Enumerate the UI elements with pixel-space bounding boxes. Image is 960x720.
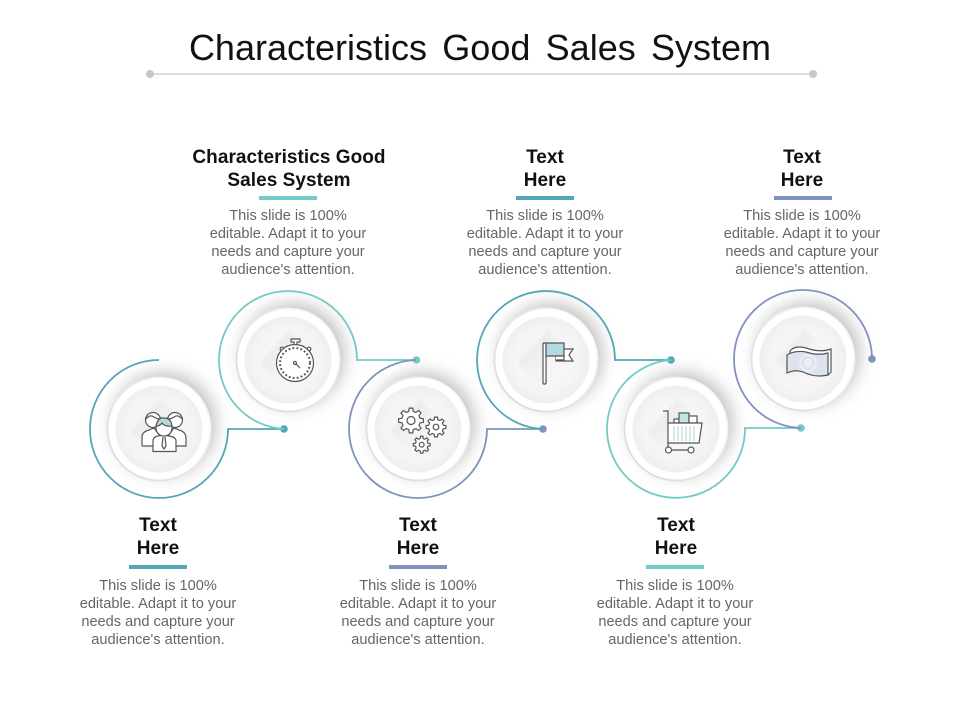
text block: step 1 body <box>80 578 236 648</box>
accent bar: step 1 <box>129 565 187 569</box>
text block: step 5 body: audience's attention. <box>608 632 742 648</box>
text block: step 5 body <box>597 578 753 648</box>
text block: step 1 body: This slide is 100% <box>99 578 217 594</box>
text block: step 3 body: This slide is 100% <box>359 578 477 594</box>
text block: step 3 body: editable. Adapt it to your <box>340 596 496 612</box>
text block: step 4 body <box>467 208 623 278</box>
text block: step 1 heading <box>137 515 179 559</box>
text block: step 6 heading: Here <box>781 170 823 191</box>
text block: step 1 heading: Text <box>139 515 177 536</box>
text block: step 1 body: needs and capture your <box>81 614 235 630</box>
text block: step 1 body: editable. Adapt it to your <box>80 596 236 612</box>
text block: step 6 body: editable. Adapt it to your <box>724 226 880 242</box>
icon: stopwatch <box>276 339 314 382</box>
text block: step 3 heading: Text <box>399 515 437 536</box>
icon: banknote <box>787 347 831 376</box>
text block: step 2 body: audience's attention. <box>221 262 355 278</box>
text block: step 5 body: This slide is 100% <box>616 578 734 594</box>
title: Characteristics Good Sales System <box>189 27 771 68</box>
text block: step 2 body: needs and capture your <box>211 244 365 260</box>
text block: step 3 heading <box>397 515 439 559</box>
step 1 disc and arc <box>90 360 288 498</box>
text block: step 4 heading: Text <box>526 147 564 168</box>
text block: step 3 body: needs and capture your <box>341 614 495 630</box>
accent bar: step 5 <box>646 565 704 569</box>
text block: step 4 body: editable. Adapt it to your <box>467 226 623 242</box>
text block: step 2 body <box>210 208 366 278</box>
accent bar: step 2 <box>259 196 317 200</box>
text block: step 2 heading: Characteristics Good <box>192 147 386 168</box>
icon: flag <box>543 343 573 384</box>
text block: step 4 body: needs and capture your <box>468 244 622 260</box>
step 5 disc and arc <box>607 360 805 498</box>
text block: step 6 body: needs and capture your <box>725 244 879 260</box>
text block: step 2 body: editable. Adapt it to your <box>210 226 366 242</box>
text block: step 5 heading <box>655 515 697 559</box>
text block: step 2 body: This slide is 100% <box>229 208 347 224</box>
text block: step 4 body: audience's attention. <box>478 262 612 278</box>
title rule <box>146 70 817 78</box>
text block: step 3 heading: Here <box>397 538 439 559</box>
text block: step 1 body: audience's attention. <box>91 632 225 648</box>
icon: team of people <box>142 412 186 452</box>
text block: step 4 body: This slide is 100% <box>486 208 604 224</box>
text block: step 4 heading: Here <box>524 170 566 191</box>
text block: step 6 body <box>724 208 880 278</box>
step 6 disc and arc <box>734 290 876 428</box>
text block: step 6 heading: Text <box>783 147 821 168</box>
text block: step 4 heading <box>524 147 566 191</box>
text block: step 6 heading <box>781 147 823 191</box>
step 3 disc and arc <box>349 360 547 498</box>
text block: step 3 body <box>340 578 496 648</box>
text block: step 3 body: audience's attention. <box>351 632 485 648</box>
step 4 disc and arc <box>477 291 675 429</box>
icon: gears <box>399 408 446 453</box>
accent bar: step 4 <box>516 196 574 200</box>
text block: step 5 body: needs and capture your <box>598 614 752 630</box>
text block: step 5 heading: Here <box>655 538 697 559</box>
text block: step 6 body: This slide is 100% <box>743 208 861 224</box>
accent bar: step 6 <box>774 196 832 200</box>
text block: step 1 heading: Here <box>137 538 179 559</box>
text block: step 5 body: editable. Adapt it to your <box>597 596 753 612</box>
text block: step 5 heading: Text <box>657 515 695 536</box>
icon: shopping cart <box>663 411 702 453</box>
accent bar: step 3 <box>389 565 447 569</box>
step 2 disc and arc <box>219 291 420 429</box>
text block: step 2 heading: Sales System <box>227 170 351 191</box>
text block: step 6 body: audience's attention. <box>735 262 869 278</box>
text block: step 2 heading <box>192 147 386 191</box>
